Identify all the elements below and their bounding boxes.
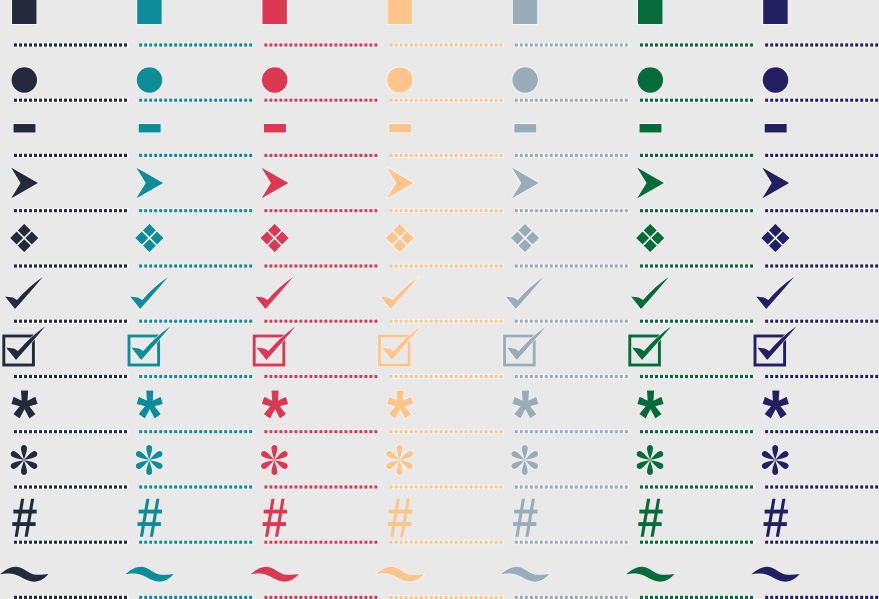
- icon: green tilde: [626, 567, 674, 582]
- icon: green minus: [640, 124, 662, 132]
- icon: red arrowhead: [261, 168, 288, 198]
- icon: indigo teardrop asterisk: [761, 445, 790, 475]
- icon: grey arrowhead: [512, 168, 539, 198]
- icon: grey circle: [512, 67, 538, 93]
- icon: green teardrop asterisk: [636, 445, 664, 475]
- icon: red tilde: [250, 567, 299, 582]
- icon: peach square: [388, 0, 412, 24]
- icon: indigo hash: #: [764, 489, 788, 548]
- icon: teal minus: [139, 124, 161, 132]
- icon: grey tilde: [501, 567, 549, 582]
- icon: teal circle: [137, 67, 162, 93]
- icon: green circle: [638, 67, 663, 93]
- icon: indigo bold asterisk: *: [762, 375, 789, 459]
- icon: red hash: #: [263, 489, 287, 548]
- icon: peach checked box: [379, 326, 421, 365]
- column: grey symbols: [501, 0, 629, 597]
- icon: grey four diamonds: [511, 224, 539, 252]
- icon: navy circle: [11, 67, 37, 93]
- icon: peach bold asterisk: *: [387, 375, 413, 459]
- icon: red teardrop asterisk: [260, 445, 289, 475]
- icon: indigo checked box: [755, 326, 797, 365]
- icon: grey hash: #: [513, 489, 537, 548]
- icon: navy hash: #: [12, 489, 37, 548]
- icon: peach hash: #: [388, 489, 412, 548]
- column: green symbols: [626, 0, 754, 597]
- icon: peach four diamonds: [386, 224, 414, 252]
- icon: navy arrowhead: [11, 168, 38, 198]
- icon: navy four diamonds: [10, 224, 38, 252]
- icon: indigo square: [763, 0, 788, 24]
- icon: navy tilde: [0, 567, 48, 582]
- icon: peach tilde: [376, 567, 424, 582]
- icon: teal arrowhead: [136, 168, 163, 198]
- icon: red check mark: [255, 277, 293, 309]
- icon: grey check mark: [506, 277, 544, 309]
- column: peach symbols: [376, 0, 504, 597]
- icon: peach circle: [387, 67, 413, 93]
- column: navy symbols: [0, 0, 128, 597]
- column: teal symbols: [125, 0, 254, 597]
- icon: grey bold asterisk: *: [512, 375, 539, 459]
- icon: peach minus: [389, 124, 411, 132]
- icon: grey teardrop asterisk: [510, 445, 539, 475]
- icon: peach teardrop asterisk: [385, 445, 414, 475]
- icon: teal four diamonds: [135, 224, 164, 252]
- icon: grey minus: [514, 124, 536, 132]
- icon: green square: [638, 0, 662, 24]
- icon: green four diamonds: [636, 224, 664, 252]
- icon: indigo arrowhead: [762, 168, 789, 198]
- icon: teal bold asterisk: *: [136, 375, 163, 459]
- icon: red four diamonds: [260, 224, 289, 252]
- icon: navy check mark: [5, 277, 43, 309]
- icon: indigo minus: [765, 124, 787, 132]
- icon: red minus: [264, 124, 286, 132]
- icon: green bold asterisk: *: [637, 375, 664, 459]
- icon: red bold asterisk: *: [262, 375, 288, 459]
- icon: teal check mark: [130, 277, 168, 309]
- icon: navy checked box: [4, 326, 46, 365]
- icon: peach arrowhead: [387, 168, 414, 198]
- icon: navy bold asterisk: *: [11, 375, 38, 459]
- icon: teal checked box: [129, 326, 171, 365]
- icon: indigo four diamonds: [761, 224, 790, 252]
- icon: green checked box: [630, 326, 672, 365]
- icon: navy teardrop asterisk: [10, 445, 38, 475]
- icon: red checked box: [254, 326, 296, 365]
- icon: red square: [262, 0, 287, 24]
- icon: indigo tilde: [751, 567, 800, 582]
- icon: green hash: #: [638, 489, 663, 548]
- icon: grey square: [513, 0, 537, 24]
- icon: teal square: [137, 0, 162, 24]
- icon: navy square: [12, 0, 36, 24]
- icon: green check mark: [631, 277, 669, 309]
- column: indigo symbols: [751, 0, 879, 597]
- icon: indigo circle: [763, 67, 788, 93]
- column: red symbols: [250, 0, 379, 597]
- icon: teal teardrop asterisk: [135, 445, 164, 475]
- icon: peach check mark: [381, 277, 419, 309]
- icon: grey checked box: [505, 326, 546, 365]
- icon: green arrowhead: [637, 168, 664, 198]
- icon: indigo check mark: [756, 277, 794, 309]
- icon: red circle: [262, 67, 288, 93]
- icon: navy minus: [14, 124, 36, 132]
- icon: teal tilde: [125, 567, 174, 582]
- icon: teal hash: #: [138, 489, 162, 548]
